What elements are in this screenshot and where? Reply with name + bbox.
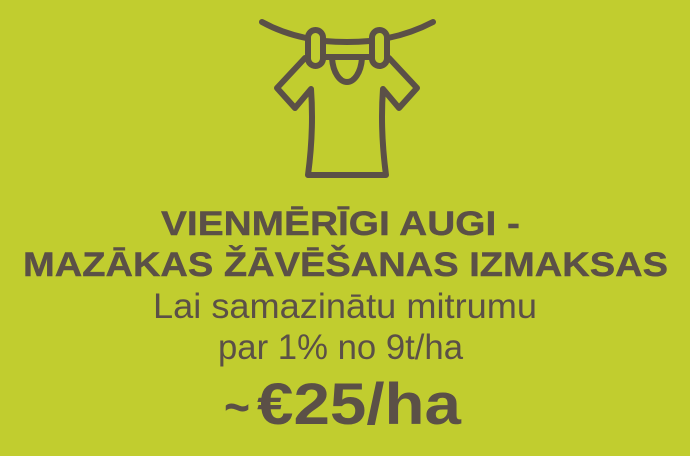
right clothes peg [372,30,387,66]
shirt collar [332,58,362,82]
heading [23,205,668,284]
t-shirt outline [277,58,417,175]
heading line 2: MAZĀKAS ŽĀVĒŠANAS IZMAKSAS [23,245,668,284]
clothesline rope [262,22,433,42]
left clothes peg [308,30,323,66]
cost figure [224,372,462,437]
heading line 1: VIENMĒRĪGI AUGI - [161,205,520,243]
shirt shoulder line [324,54,370,60]
description line 1: Lai samazinātu mitrumu [153,287,537,326]
description line 2: par 1% no 9t/ha [218,328,464,367]
icon: t-shirt on clothesline [262,22,433,175]
tilde: ~ [224,379,250,435]
description text [153,287,537,367]
price per hectare: €25/ha [257,372,462,437]
